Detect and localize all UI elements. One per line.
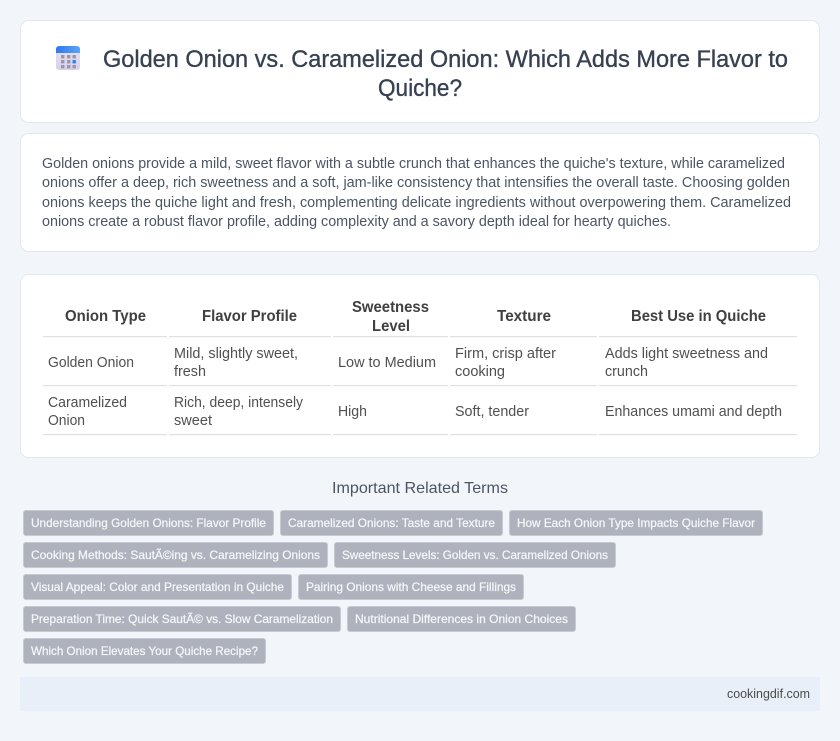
tag: Nutritional Differences in Onion Choices: [355, 612, 568, 626]
table header row: Texture: [497, 308, 551, 325]
table header row: Level: [372, 318, 410, 335]
tag: Which Onion Elevates Your Quiche Recipe?: [31, 644, 258, 658]
table row: caramelized onion: Caramelized: [48, 395, 127, 411]
table row: caramelized onion: High: [338, 404, 367, 420]
tag: [510, 510, 762, 536]
table row: caramelized onion: [48, 395, 782, 429]
tag: Understanding Golden Onions: Flavor Profile: [31, 516, 266, 530]
panel: summary paragraph: Golden onions provide a mild, sweet flavor with a subtle crunch that enhances the quiche's texture, while caramelized: [42, 156, 785, 172]
tag: Visual Appeal: Color and Presentation in Quiche: [31, 580, 284, 594]
panel: header: [20, 20, 820, 122]
table row: caramelized onion: Enhances umami and depth: [605, 404, 782, 420]
tag: [348, 606, 576, 632]
panel: summary paragraph: onions keeps the quiche light and fresh, complementing delicate ingredients without overpowering them. Caramelized: [42, 195, 791, 211]
tag: Caramelized Onions: Taste and Texture: [288, 516, 495, 530]
table row: golden onion: Low to Medium: [338, 355, 436, 371]
table row: golden onion: Firm, crisp after: [455, 346, 556, 362]
table header row: Sweetness: [352, 299, 429, 316]
table header row: Best Use in Quiche: [631, 308, 766, 325]
panel: comparison table: [20, 274, 820, 458]
table row: caramelized onion: sweet: [174, 413, 212, 429]
table header row: Onion Type: [65, 308, 146, 325]
table row: golden onion: cooking: [455, 364, 505, 380]
footer: cookingdif.com: [727, 686, 810, 701]
title: Quiche?: [378, 75, 462, 102]
tag: [24, 510, 274, 536]
related term tags: [24, 510, 762, 664]
table row: caramelized onion: Onion: [48, 413, 85, 429]
tag: [24, 638, 266, 664]
title: Golden Onion vs. Caramelized Onion: Which Adds More Flavor to: [103, 46, 788, 73]
table row: golden onion: [48, 346, 768, 380]
table header row: Flavor Profile: [202, 308, 297, 325]
table row: caramelized onion: Rich, deep, intensely: [174, 395, 304, 411]
table row: golden onion: fresh: [174, 364, 206, 380]
table row: golden onion: Mild, slightly sweet,: [174, 346, 298, 362]
tag: How Each Onion Type Impacts Quiche Flavor: [517, 516, 755, 530]
heading: important related terms: Important Related Terms: [332, 480, 508, 497]
tag: [334, 542, 616, 568]
table row: golden onion: Adds light sweetness and: [605, 346, 768, 362]
footer: [20, 677, 820, 711]
table row: golden onion: crunch: [605, 364, 648, 380]
tag: [280, 510, 502, 536]
tag: [24, 606, 340, 632]
tag: [24, 574, 292, 600]
tag: Preparation Time: Quick SautÃ© vs. Slow Caramelization: [31, 612, 333, 626]
title: [103, 46, 788, 102]
icon: calendar: [56, 46, 80, 70]
tag: Sweetness Levels: Golden vs. Caramelized Onions: [342, 548, 608, 562]
panel: summary paragraph: [20, 134, 820, 252]
table row: golden onion: Golden Onion: [48, 355, 134, 371]
tag: Pairing Onions with Cheese and Fillings: [306, 580, 516, 594]
table header row: [65, 299, 766, 335]
panel: summary paragraph: onions offer a deep, rich sweetness and a soft, jam-like consistency that intensifies the overall taste. Choosing golden: [42, 175, 790, 191]
tag: [298, 574, 524, 600]
tag: Cooking Methods: SautÃ©ing vs. Caramelizing Onions: [31, 548, 320, 562]
table row: caramelized onion: Soft, tender: [455, 404, 529, 420]
tag: [24, 542, 328, 568]
panel: summary paragraph: onions create a robust flavor profile, adding complexity and a savory depth ideal for hearty quiches.: [42, 214, 671, 230]
